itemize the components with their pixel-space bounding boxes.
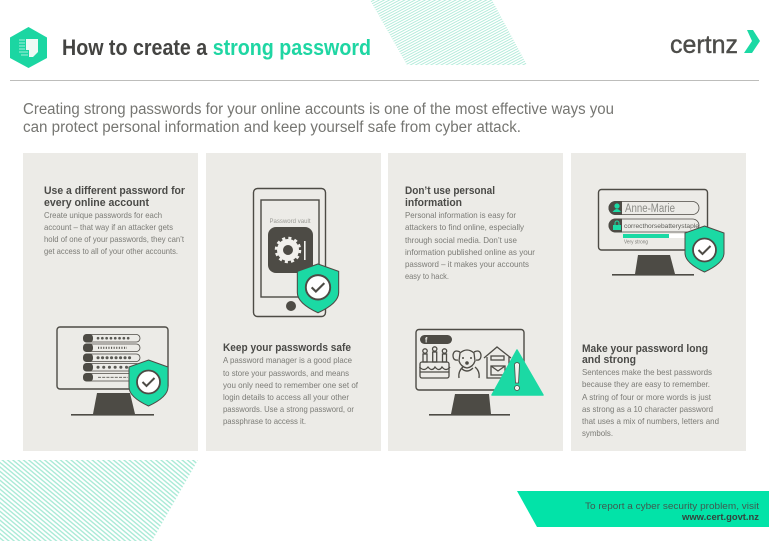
body text: keep passwords safe: A password manager is a good place xyxy=(223,355,352,365)
certnz logo: certnz xyxy=(670,31,738,59)
body text: long and strong xyxy=(582,367,719,438)
body text: keep passwords safe: login details to access all your other xyxy=(223,392,349,402)
footer text: To report a cyber security problem, visit xyxy=(585,501,759,512)
body text: personal information: easy to hack. xyxy=(405,271,449,281)
body text: personal information xyxy=(405,210,535,281)
heading: personal information: information xyxy=(405,197,462,209)
icon: monitor with personal details: f xyxy=(425,338,428,344)
heading: keep passwords safe: Keep your passwords safe xyxy=(223,342,351,354)
icon: phone with password vault xyxy=(254,188,326,316)
title: How to create a strong password xyxy=(62,35,371,60)
body text: keep passwords safe: passphrase to access it. xyxy=(223,416,306,426)
heading: different password: every online account xyxy=(44,197,149,209)
footer text xyxy=(585,501,759,523)
header divider xyxy=(10,80,759,81)
body text: long and strong: as strong as a 10 character password xyxy=(582,404,713,414)
body text: keep passwords safe: passwords. Use a strong password, or xyxy=(223,404,354,414)
body text: different password: get access to all of your other accounts. xyxy=(44,246,178,256)
heading: long and strong: Make your password long xyxy=(582,343,708,355)
body text: long and strong: A string of four or more words is just xyxy=(582,392,712,402)
icon: phone with password vault: Password vault xyxy=(270,219,311,225)
body text: personal information: password – it makes your accounts xyxy=(405,259,529,269)
body text: keep passwords safe: you only need to remember one set of xyxy=(223,380,359,390)
body text: different password xyxy=(44,210,185,256)
body text: different password: Create unique passwords for each xyxy=(44,210,162,220)
icon: warning triangle xyxy=(492,350,543,395)
heading: long and strong xyxy=(582,343,708,366)
panel: long and strong xyxy=(571,153,746,451)
body text: long and strong: that uses a mix of numbers, letters and xyxy=(582,416,719,426)
icon: monitor with login form: Anne-Marie xyxy=(625,203,675,215)
body text: different password: account – that way if an attacker gets xyxy=(44,222,173,232)
body text: personal information: through social media. Don’t use xyxy=(405,235,517,245)
footer text: www.cert.govt.nz xyxy=(681,512,759,523)
body text: keep passwords safe xyxy=(223,355,359,426)
panel: keep passwords safe xyxy=(206,153,381,451)
heading: long and strong: and strong xyxy=(582,354,636,366)
intro text: can protect personal information and keep yourself safe from cyber attack. xyxy=(23,119,521,136)
hexagon logo icon xyxy=(10,27,47,68)
body text: personal information: information published online as your xyxy=(405,247,535,257)
heading: different password xyxy=(44,185,186,209)
icon: monitor with personal details xyxy=(416,330,524,416)
icon: monitor with login form: correcthorsebatterystaple xyxy=(624,223,699,230)
bottom hatched shape xyxy=(0,460,198,541)
icon: monitor with password list xyxy=(57,327,168,416)
icon: monitor with login form xyxy=(598,190,708,276)
heading: different password: Use a different password for xyxy=(44,185,186,197)
body text: long and strong: Sentences make the best passwords xyxy=(582,367,712,377)
body text: different password: hold of one of your passwords, they can’t xyxy=(44,234,185,244)
body text: personal information: attackers to find online, especially xyxy=(405,222,525,232)
body text: keep passwords safe: to store your passwords, and means xyxy=(223,368,349,378)
intro text: Creating strong passwords for your online accounts is one of the most effective ways you xyxy=(23,101,614,118)
body text: long and strong: symbols. xyxy=(582,428,613,438)
heading: personal information xyxy=(405,185,495,209)
top hatched shape xyxy=(370,0,527,65)
body text: personal information: Personal information is easy for xyxy=(405,210,516,220)
panel: personal information xyxy=(388,153,563,451)
icon: shield with check xyxy=(129,360,168,406)
icon: shield with check xyxy=(685,226,724,272)
panel: different password xyxy=(23,153,198,451)
footer banner xyxy=(517,491,769,527)
intro text xyxy=(23,101,614,136)
icon: monitor with login form: Very strong xyxy=(624,240,648,246)
body text: long and strong: because they are easy to remember. xyxy=(582,379,710,389)
icon: shield with check xyxy=(297,264,339,313)
heading: personal information: Don’t use personal xyxy=(405,185,495,197)
